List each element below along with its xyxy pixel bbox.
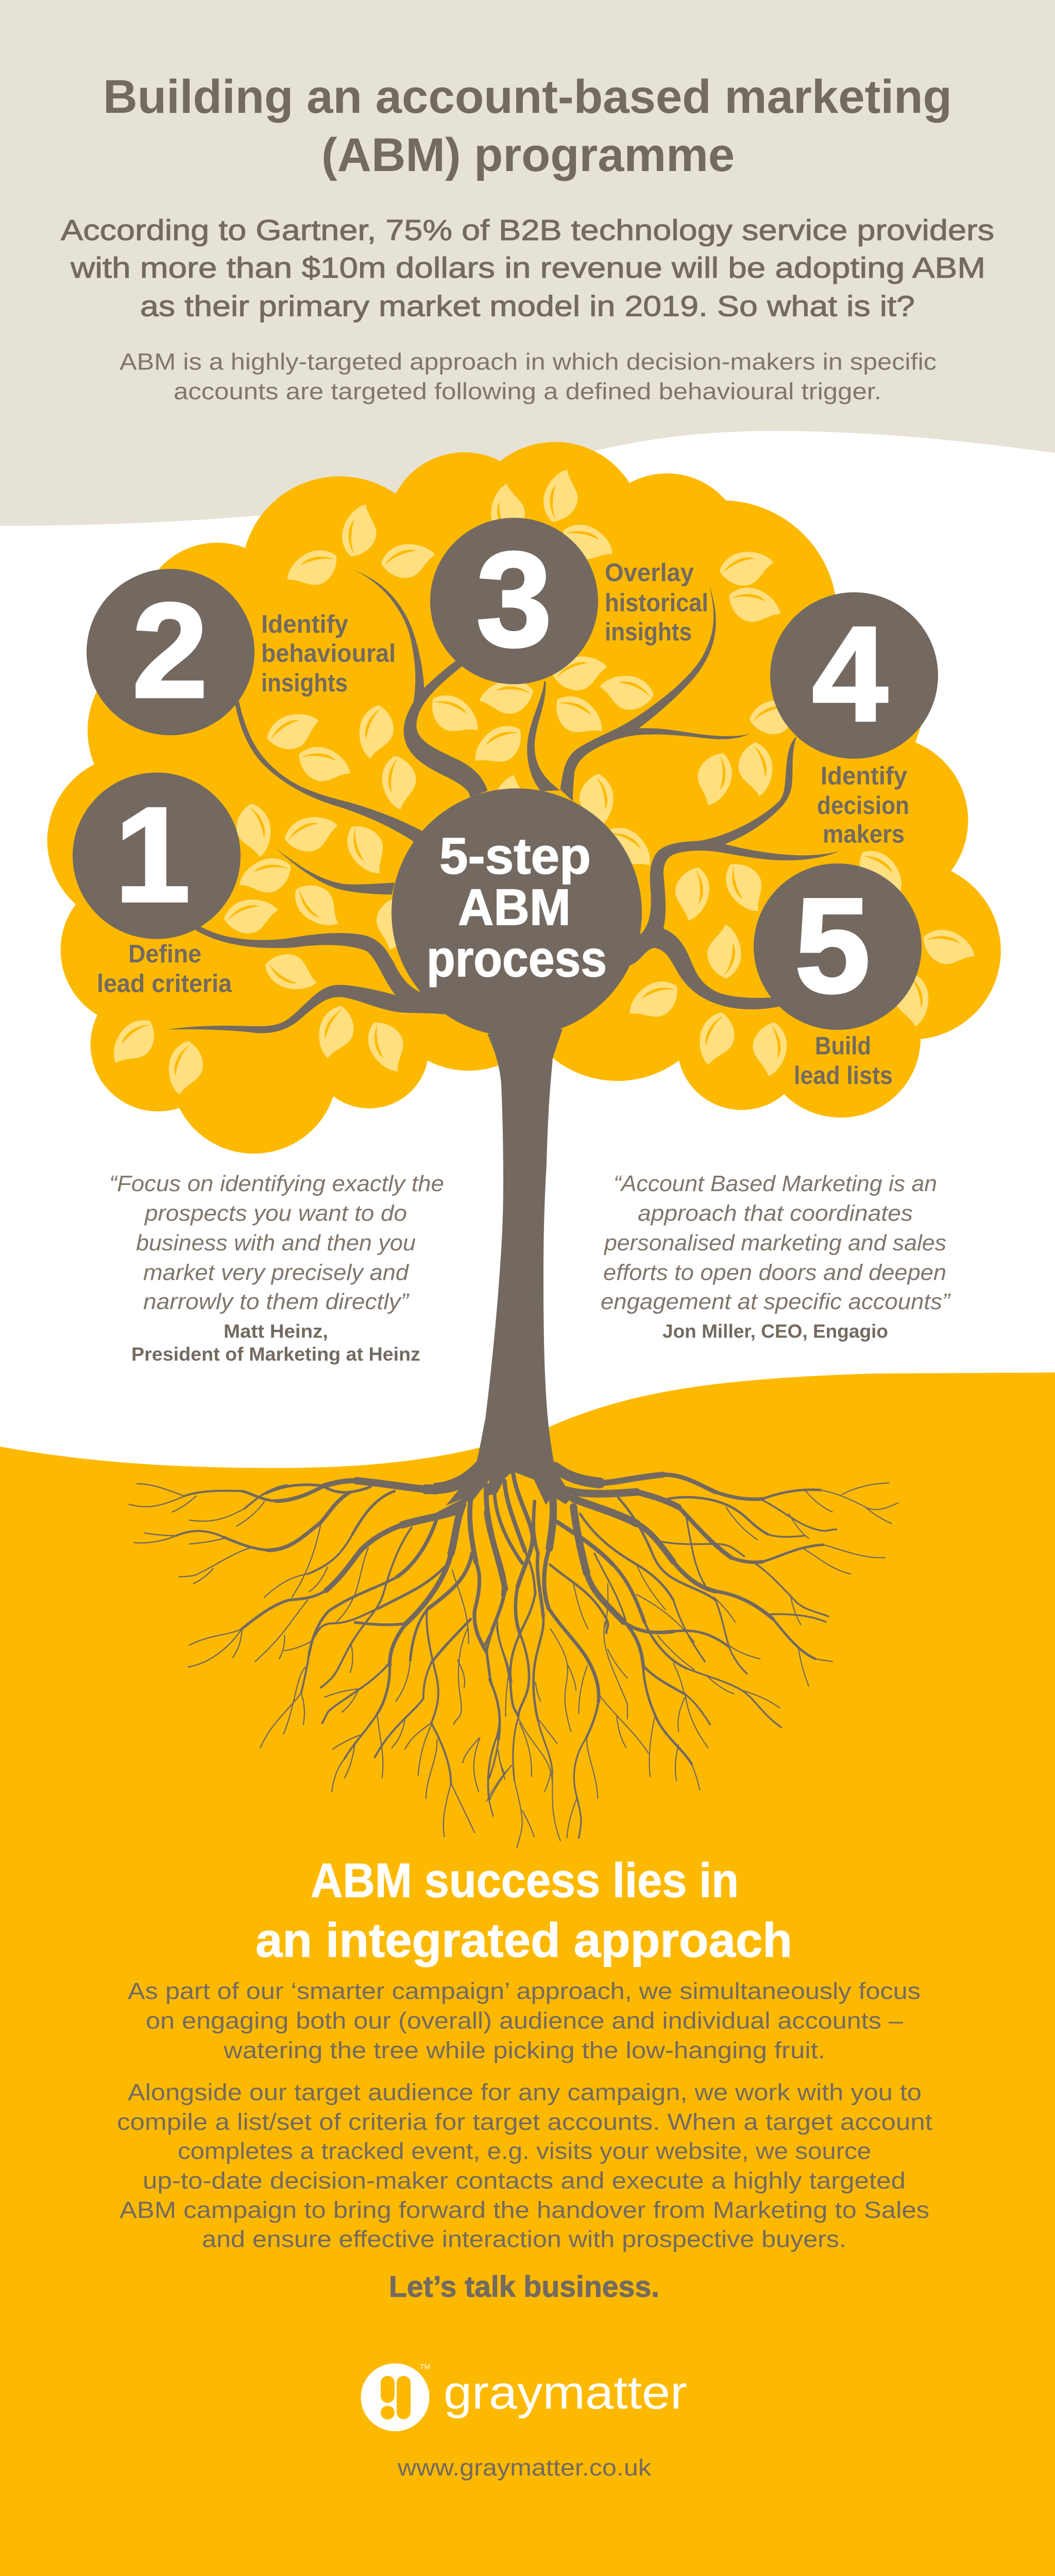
step 3 badge: 3 (477, 524, 552, 674)
body paragraph 1: As part of our ‘smarter campaign’ approach, we simultaneously focus (128, 1978, 921, 2004)
body paragraph 1: watering the tree while picking the low-hanging fruit. (223, 2037, 825, 2063)
step 3 label (605, 558, 708, 646)
branches: upper right (527, 585, 750, 801)
leaves (102, 468, 978, 1099)
title: (ABM) programme (321, 128, 735, 181)
quote: Matt Heinz (109, 1171, 444, 1365)
body paragraph 1 (128, 1978, 921, 2063)
quote: Jon Miller: efforts to open doors and deepen (603, 1260, 946, 1285)
step 3 label: Overlay (605, 558, 694, 587)
logo: graymatter: TM (420, 2363, 430, 2371)
quote: Matt Heinz: narrowly to them directly” (143, 1289, 410, 1314)
logo: graymatter: graymatter (444, 2366, 687, 2419)
body paragraph 2: and ensure effective interaction with prospective buyers. (202, 2226, 846, 2252)
step 1 label (97, 939, 232, 998)
quote: Jon Miller (601, 1171, 951, 1342)
step 5 badge: 5 (795, 870, 870, 1021)
quote: Matt Heinz: “Focus on identifying exactly the (109, 1171, 444, 1196)
branches: right (610, 736, 840, 1009)
website address: www.graymatter.co.uk (397, 2454, 651, 2481)
intro statement: According to Gartner, 75% of B2B technology service providers (61, 214, 994, 247)
quote: Matt Heinz: business with and then you (136, 1230, 416, 1256)
quote: Matt Heinz: prospects you want to do (144, 1201, 407, 1226)
step 5 label: lead lists (794, 1061, 893, 1090)
integrated approach heading: an integrated approach (256, 1913, 792, 1968)
background: yellow ground (0, 1372, 1055, 2576)
branches: upper left (235, 569, 487, 856)
background: beige header wave (0, 0, 1055, 526)
centre circle: 5-step ABM process: ABM (458, 879, 571, 936)
step 2 badge: 2 (132, 575, 208, 726)
ABM definition text (120, 349, 937, 404)
body paragraph 2: completes a tracked event, e.g. visits your website, we source (178, 2138, 871, 2164)
step 2 label: insights (261, 668, 348, 697)
body paragraph 1: on engaging both our (overall) audience and individual accounts – (146, 2008, 904, 2034)
step 1 badge: 1 (115, 779, 190, 930)
branches: lower left (167, 849, 473, 1033)
step 5 badge (754, 863, 922, 1030)
centre circle: 5-step ABM process (392, 788, 642, 1037)
body paragraph 2 (117, 2079, 932, 2252)
centre circle: 5-step ABM process: process (427, 930, 607, 988)
title (103, 70, 952, 181)
step 4 badge (770, 592, 938, 759)
step 1 label: Define (128, 939, 201, 968)
logo: graymatter (361, 2363, 687, 2431)
step 2 label (261, 609, 396, 697)
quote: Matt Heinz: Matt Heinz, (224, 1321, 328, 1342)
roots: right side (484, 1467, 898, 1848)
step 5 label: Build (815, 1031, 871, 1060)
title: Building an account-based marketing (103, 70, 952, 123)
quote: Jon Miller: approach that coordinates (638, 1201, 913, 1226)
quote: Jon Miller: personalised marketing and sales (603, 1230, 946, 1256)
intro statement: as their primary market model in 2019. So what is it? (140, 291, 915, 323)
step 3 label: historical (605, 588, 708, 617)
tree canopy (47, 442, 1001, 1154)
step 4 label: makers (823, 819, 905, 848)
step 4 label: Identify (821, 761, 907, 790)
trunk (477, 1029, 563, 1465)
intro statement (61, 214, 994, 323)
body paragraph 2: up-to-date decision-maker contacts and execute a highly targeted (143, 2167, 906, 2194)
integrated approach heading: ABM success lies in (311, 1853, 739, 1908)
ABM definition text: ABM is a highly-targeted approach in which decision-makers in specific (120, 349, 937, 375)
step 2 label: Identify (261, 609, 348, 638)
body paragraph 2: ABM campaign to bring forward the handover from Marketing to Sales (120, 2197, 929, 2223)
roots: left side (129, 1419, 572, 1837)
step 1 badge (73, 773, 241, 939)
step 3 badge (430, 518, 598, 684)
step 4 label (817, 761, 909, 848)
step 3 label: insights (605, 617, 692, 646)
quote: Matt Heinz: President of Marketing at Heinz (131, 1344, 420, 1365)
integrated approach heading (256, 1853, 792, 1968)
step 2 label: behavioural (261, 639, 396, 667)
step 4 label: decision (817, 791, 909, 820)
quote: Jon Miller: Jon Miller, CEO, Engagio (662, 1321, 888, 1342)
call to action: Let’s talk business. (389, 2270, 659, 2303)
step 1 label: lead criteria (97, 969, 232, 998)
body paragraph 2: compile a list/set of criteria for target accounts. When a target account (117, 2109, 932, 2135)
body paragraph 2: Alongside our target audience for any campaign, we work with you to (128, 2079, 922, 2105)
step 5 label (794, 1031, 893, 1090)
quote: Jon Miller: “Account Based Marketing is an (614, 1171, 937, 1196)
intro statement: with more than $10m dollars in revenue will be adopting ABM (70, 252, 985, 284)
step 4 badge: 4 (812, 598, 889, 749)
step 2 badge (87, 569, 254, 735)
quote: Matt Heinz: market very precisely and (143, 1260, 410, 1285)
ABM definition text: accounts are targeted following a defined behavioural trigger. (174, 378, 881, 404)
centre circle: 5-step ABM process: 5-step (439, 828, 591, 885)
quote: Jon Miller: engagement at specific accounts” (601, 1289, 951, 1314)
